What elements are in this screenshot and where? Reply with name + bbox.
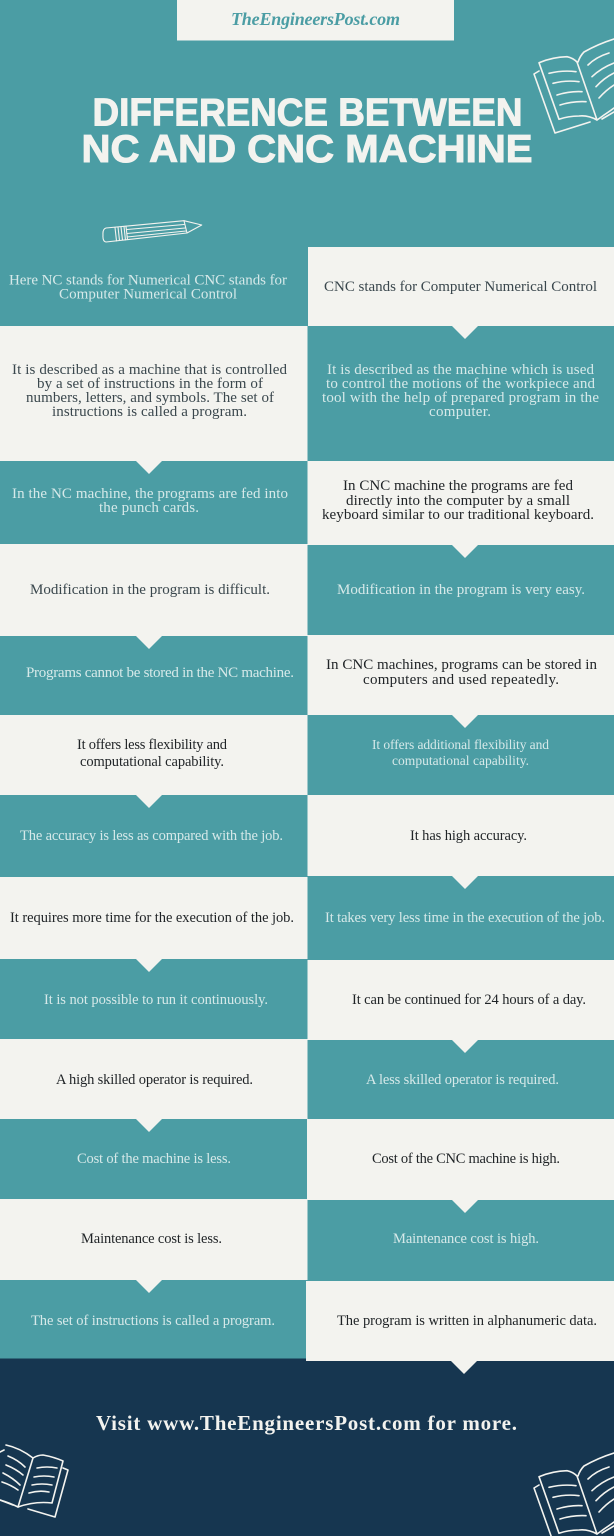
CNC column text: It is described as the machine which is used: [327, 362, 594, 378]
CNC column text: directly into the computer by a small: [346, 493, 570, 509]
CNC column text: tool with the help of prepared program in the: [322, 390, 599, 406]
NC column text: Maintenance cost is less.: [81, 1231, 222, 1247]
NC column text: It is not possible to run it continuously.: [44, 992, 268, 1008]
NC column text: Cost of the machine is less.: [77, 1151, 231, 1167]
NC column text: the punch cards.: [99, 500, 199, 516]
NC column text: by a set of instructions in the form of: [37, 376, 263, 392]
header banner: TheEngineersPost.com: [231, 9, 400, 29]
CNC column text: Cost of the CNC machine is high.: [372, 1151, 560, 1167]
CNC column text: A less skilled operator is required.: [366, 1072, 559, 1088]
NC column text: The accuracy is less as compared with the job.: [20, 828, 283, 844]
NC column text: A high skilled operator is required.: [56, 1072, 253, 1088]
title: [82, 92, 532, 171]
CNC column text: It takes very less time in the execution of the job.: [325, 910, 605, 926]
NC column text: Here NC stands for Numerical CNC stands for: [9, 272, 287, 288]
CNC column text: It can be continued for 24 hours of a day.: [352, 992, 586, 1008]
icon: open book bottom left: [0, 1445, 68, 1517]
icon: open book top right: [534, 39, 614, 133]
NC column text: Modification in the program is difficult.: [30, 582, 270, 598]
icon: pencil: [103, 221, 202, 242]
NC column text: numbers, letters, and symbols. The set of: [26, 390, 274, 406]
icon: open book bottom right: [534, 1453, 614, 1536]
CNC column text: In CNC machine the programs are fed: [343, 478, 574, 494]
NC column text: Computer Numerical Control: [59, 286, 237, 302]
panel: right column rows: [307, 247, 614, 1213]
NC column text: It is described as a machine that is controlled: [12, 362, 288, 378]
NC column text: computational capability.: [80, 754, 224, 770]
panel: footer background: [0, 1358, 614, 1536]
panel: last CNC row: [306, 1281, 614, 1374]
header banner: [177, 0, 454, 40]
NC column text: In the NC machine, the programs are fed into: [12, 486, 288, 502]
panel: left column rows: [0, 326, 308, 1293]
CNC column text: It offers additional flexibility and: [372, 737, 549, 752]
CNC column text: In CNC machines, programs can be stored in: [326, 657, 598, 673]
CNC column text: CNC stands for Computer Numerical Control: [324, 279, 597, 295]
CNC column text: The program is written in alphanumeric data.: [337, 1313, 597, 1329]
CNC column text: computational capability.: [392, 753, 529, 768]
CNC column text: [322, 279, 605, 1329]
CNC column text: keyboard similar to our traditional keyboard.: [322, 507, 594, 523]
NC column text: The set of instructions is called a program.: [31, 1313, 275, 1329]
CNC column text: Modification in the program is very easy.: [337, 582, 585, 598]
CNC column text: It has high accuracy.: [410, 828, 527, 844]
NC column text: instructions is called a program.: [52, 404, 247, 420]
footer call to action: Visit www.TheEngineersPost.com for more.: [96, 1411, 517, 1435]
title: DIFFERENCE BETWEEN: [92, 92, 522, 135]
NC column text: Programs cannot be stored in the NC machine.: [26, 665, 294, 681]
NC column text: It requires more time for the execution of the job.: [10, 910, 294, 926]
CNC column text: to control the motions of the workpiece and: [326, 376, 596, 392]
CNC column text: computers and used repeatedly.: [363, 672, 559, 688]
CNC column text: computer.: [429, 404, 491, 420]
CNC column text: Maintenance cost is high.: [393, 1231, 539, 1247]
NC column text: [9, 272, 294, 1329]
NC column text: It offers less flexibility and: [77, 737, 228, 753]
title: NC AND CNC MACHINE: [82, 128, 532, 171]
